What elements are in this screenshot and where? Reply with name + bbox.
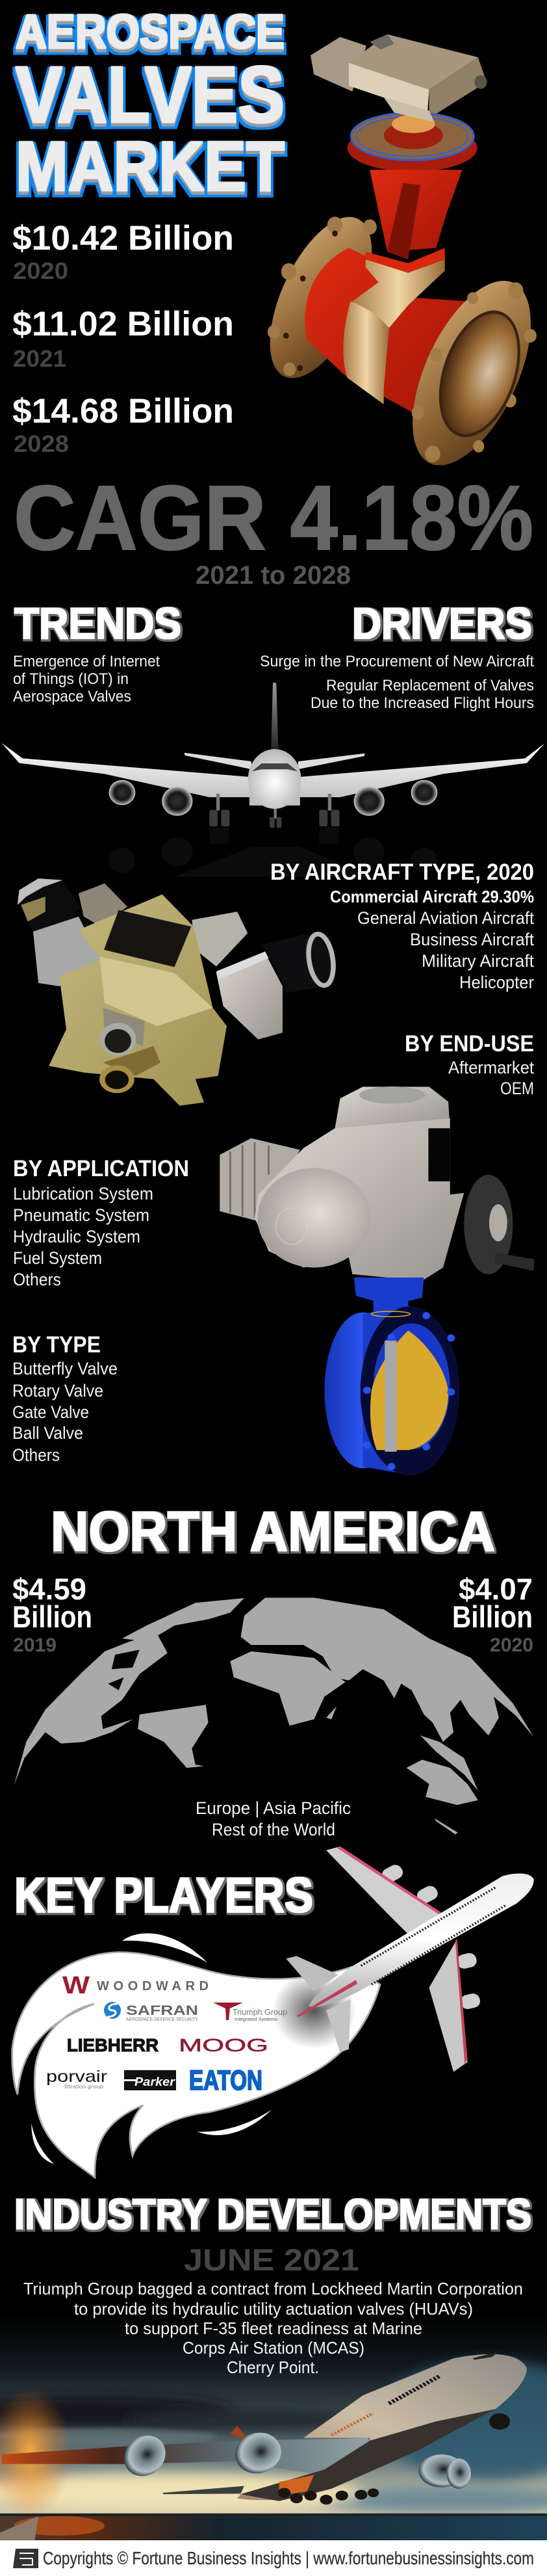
development text [23, 2242, 523, 2377]
value 2019: $4.59 [12, 1572, 86, 1606]
logo: Safran: AEROSPACE·DEFENCE·SECURITY [126, 2017, 198, 2022]
icon: red and gold aerospace valve [249, 34, 547, 486]
logo: Woodward [62, 1972, 209, 1999]
by aircraft type: BY AIRCRAFT TYPE, 2020 [270, 860, 534, 885]
by type: Gate Valve [12, 1402, 89, 1422]
title: AEROSPACE [16, 5, 285, 59]
value 2021: $11.02 Billion [12, 305, 234, 343]
logo: Safran [104, 2002, 198, 2022]
by aircraft type: Business Aircraft [410, 930, 534, 949]
trends: of Things (IOT) in [13, 670, 129, 688]
logo: Porvair: filtration group [64, 2084, 104, 2090]
by type: Ball Valve [12, 1423, 83, 1443]
key players heading: KEY PLAYERS [14, 1868, 313, 1923]
logo: Porvair: porvair [46, 2068, 107, 2086]
by aircraft type [270, 860, 534, 992]
value 2021: 2021 [13, 345, 66, 372]
logo: Triumph Group: Integrated Systems [235, 2016, 277, 2022]
other regions: Rest of the World [212, 1820, 335, 1839]
by application: Hydraulic System [13, 1227, 140, 1246]
icon: brass valve [18, 877, 337, 1106]
by aircraft type: General Aviation Aircraft [357, 908, 534, 928]
by type: BY TYPE [12, 1332, 101, 1358]
value 2028 [12, 392, 234, 457]
fuselage [237, 2354, 527, 2500]
value 2020: 2020 [13, 257, 68, 284]
logos [46, 1972, 287, 2096]
value 2019: 2019 [13, 1635, 57, 1656]
sky [0, 2316, 547, 2516]
by application: Lubrication System [13, 1184, 153, 1203]
trends: Emergence of Internet [13, 653, 160, 670]
icon: front view airplane with reflection [2, 683, 545, 877]
by aircraft type: Helicopter [459, 973, 534, 992]
value 2019 [12, 1572, 92, 1656]
development text: Corps Air Station (MCAS) [183, 2338, 364, 2358]
engines [118, 2432, 171, 2480]
drivers: Regular Replacement of Valves [326, 677, 534, 694]
by application: Fuel System [13, 1248, 102, 1268]
logo: Eaton: EATON [189, 2065, 262, 2096]
value 2020: Billion [452, 1599, 533, 1634]
value 2020 [452, 1572, 533, 1656]
development text: Cherry Point. [227, 2358, 319, 2377]
value 2028: $14.68 Billion [12, 392, 234, 430]
logo: Triumph Group: Triumph Group [233, 2007, 287, 2017]
white swoosh trail [12, 1934, 380, 2177]
airplane take-off scene [0, 2316, 547, 2540]
drivers: Surge in the Procurement of New Aircraft [260, 653, 534, 670]
by type: Rotary Valve [12, 1381, 103, 1400]
north america values [12, 1572, 533, 1656]
value 2020: $4.07 [459, 1572, 533, 1606]
value 2020: $10.42 Billion [12, 219, 234, 257]
logo: Porvair [46, 2068, 107, 2090]
by type: Butterfly Valve [12, 1359, 118, 1378]
trends [13, 599, 181, 705]
icon: silver actuator with blue butterfly valve [220, 1086, 535, 1475]
title: VALVES [16, 51, 285, 140]
trends: Aerospace Valves [13, 688, 131, 705]
value 2021 [12, 305, 234, 372]
by end-use: OEM [500, 1079, 534, 1098]
title: MARKET [16, 127, 285, 206]
by application: Pneumatic System [13, 1205, 149, 1225]
by application [13, 1156, 189, 1289]
logo: Woodward: W [62, 1972, 90, 1999]
logo: Triumph Group [213, 2003, 287, 2022]
runway [0, 2516, 547, 2540]
logo: Parker [124, 2070, 176, 2090]
drivers: Due to the Increased Flight Hours [311, 694, 534, 712]
value 2028: 2028 [14, 430, 69, 457]
value 2019: Billion [12, 1599, 92, 1634]
by type [12, 1332, 118, 1465]
title [16, 5, 285, 206]
icon: world map [14, 1597, 534, 1834]
development text: to support F-35 fleet readiness at Marine [125, 2319, 422, 2338]
by aircraft type: Commercial Aircraft 29.30% [330, 887, 534, 906]
by aircraft type: Military Aircraft [422, 951, 534, 971]
logo: Safran: SAFRAN [126, 2003, 198, 2018]
development text: Triumph Group bagged a contract from Lockheed Martin Corporation [23, 2279, 523, 2298]
north america heading: NORTH AMERICA [51, 1501, 495, 1563]
wing [230, 2426, 248, 2441]
logo: Woodward: WOODWARD [97, 1979, 209, 1993]
development text: JUNE 2021 [184, 2242, 359, 2277]
logo: Liebherr: LIEBHERR [67, 2035, 159, 2055]
development text: to provide its hydraulic utility actuation valves (HUAVs) [74, 2299, 473, 2319]
reflection [109, 827, 437, 877]
by end-use: Aftermarket [448, 1058, 534, 1077]
by end-use [405, 1031, 534, 1098]
footer [0, 2540, 547, 2576]
by application: BY APPLICATION [13, 1156, 189, 1181]
icon: top-view airplane [286, 1847, 534, 2072]
value 2020: 2020 [490, 1635, 533, 1656]
other regions: Europe | Asia Pacific [196, 1798, 351, 1818]
drivers: DRIVERS [352, 599, 532, 648]
drivers [260, 599, 534, 712]
other regions [196, 1798, 351, 1839]
by type: Others [12, 1445, 60, 1465]
CAGR: 2021 to 2028 [196, 561, 351, 590]
landing gear [278, 2413, 510, 2504]
trends: TRENDS [14, 599, 181, 648]
market values [12, 219, 234, 457]
icon: Fortune Business Insights logo [13, 2549, 38, 2568]
by application: Others [13, 1270, 61, 1289]
logo: Moog: MOOG [179, 2035, 268, 2055]
value 2020 [12, 219, 234, 284]
logo: Parker: Parker [134, 2075, 175, 2088]
by end-use: BY END-USE [405, 1031, 534, 1057]
